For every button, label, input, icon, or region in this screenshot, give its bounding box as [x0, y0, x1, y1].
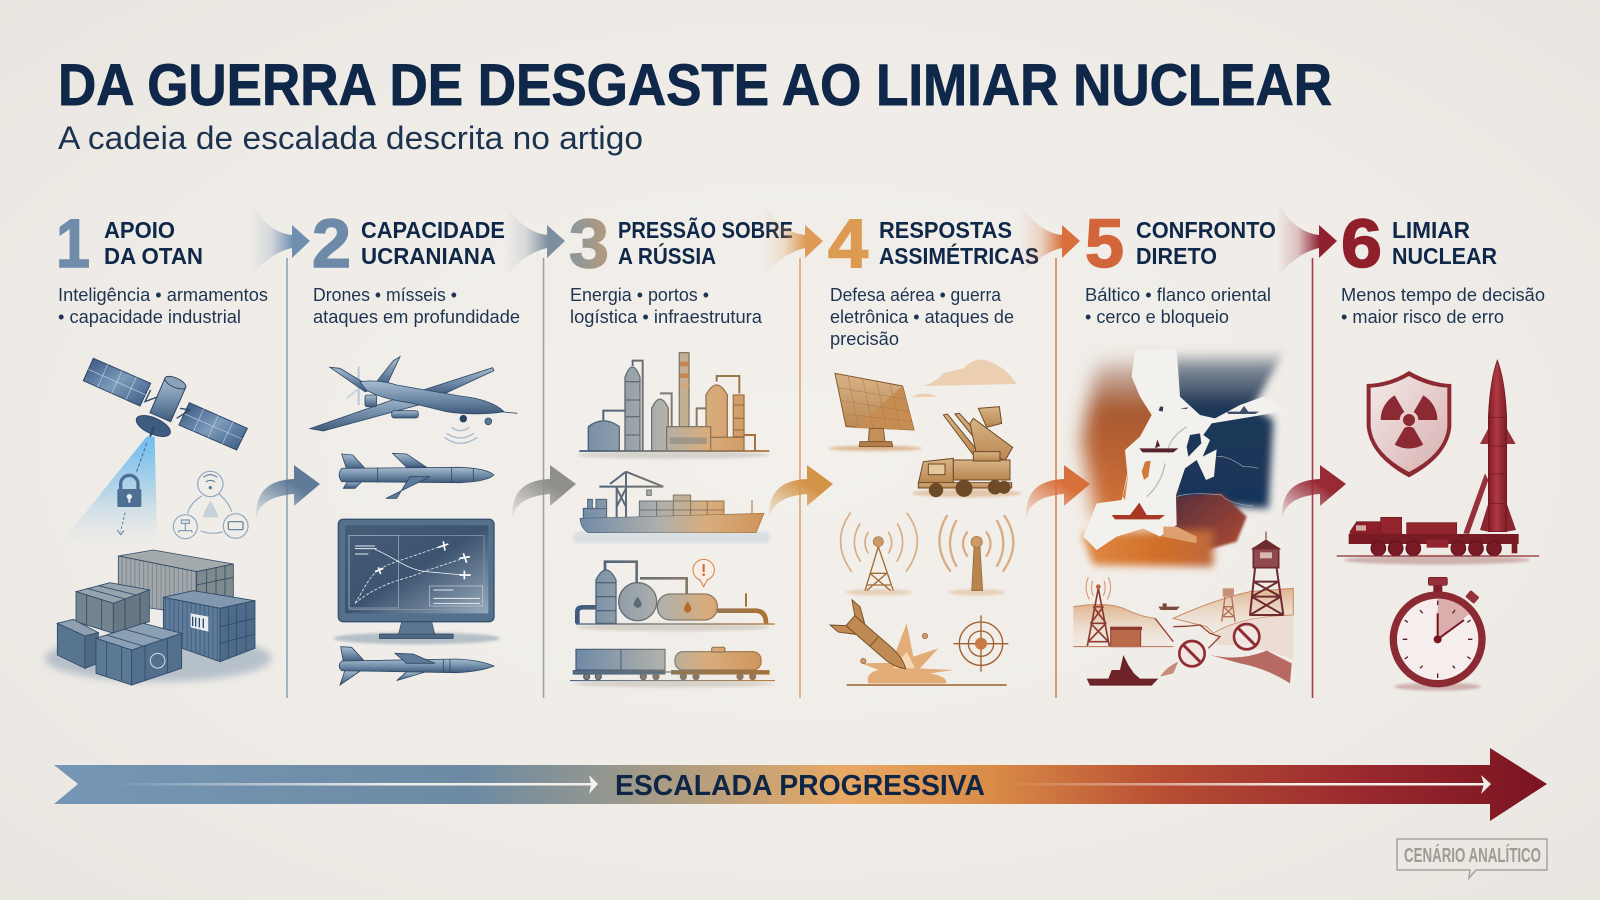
icon: freight train: [570, 647, 775, 687]
top arrows between step headers: [250, 203, 1337, 277]
icon: network cycle: [173, 471, 248, 539]
step 1 header: 1: [56, 205, 90, 282]
icon: supply containers and crates: [45, 550, 272, 685]
icon: nuclear shield: [1367, 371, 1451, 477]
icon: second missile: [339, 647, 494, 685]
step 3 header: 3: [569, 205, 609, 282]
step 2 header: ataques em profundidade: [313, 306, 520, 327]
illustrations steps 1 and 2: [45, 357, 517, 685]
step 5 header: • cerco e bloqueio: [1085, 306, 1229, 327]
icon: electronic warfare towers: [841, 513, 1013, 596]
icon: air-defence launcher truck: [912, 407, 1022, 497]
step 4 header: [828, 205, 1039, 349]
icon: cruise missile: [339, 453, 494, 498]
step 1 header: APOIO: [104, 217, 175, 243]
logo: Cenário Analítico: [1397, 839, 1547, 878]
step 2 header: CAPACIDADE: [361, 217, 505, 243]
step 6 header: NUCLEAR: [1392, 243, 1497, 269]
step 4 header: RESPOSTAS: [879, 217, 1012, 243]
step 1 header: Inteligência • armamentos: [58, 284, 268, 305]
map: Baltic region: [1082, 350, 1285, 567]
step 6 header: • maior risco de erro: [1341, 306, 1504, 327]
step 4 header: ASSIMÉTRICAS: [879, 242, 1039, 269]
step 5 header: CONFRONTO: [1136, 217, 1276, 243]
icon: satellite beam and lock: [63, 437, 157, 548]
icon: ballistic missile on launcher: [1337, 360, 1539, 565]
step 6 header: [1341, 205, 1545, 327]
step 5 header: Báltico • flanco oriental: [1085, 284, 1271, 305]
step 1 header: [56, 205, 268, 327]
step 6 header: Menos tempo de decisão: [1341, 284, 1545, 305]
icon: stopwatch: [1390, 577, 1486, 691]
icon: cargo ship and crane: [573, 472, 770, 543]
subtitle: A cadeia de escalada descrita no artigo: [58, 120, 643, 156]
step 2 header: [312, 205, 520, 327]
step 3 header: Energia • portos •: [570, 284, 709, 305]
step 2 header: 2: [312, 205, 351, 282]
step 4 header: 4: [828, 205, 868, 282]
step 3 header: logística • infraestrutura: [570, 306, 763, 327]
step 3 header: A RÚSSIA: [618, 242, 716, 269]
step 1 header: • capacidade industrial: [58, 306, 241, 327]
step 4 header: eletrônica • ataques de: [830, 306, 1014, 327]
icon: drone: [310, 357, 517, 443]
icon: pipeline and tanks: [576, 559, 775, 631]
icon: control monitor: [333, 519, 500, 644]
step 5 header: [1085, 205, 1276, 327]
icon: border scene with towers and blocks: [1073, 532, 1293, 686]
escalation arrow: [54, 748, 1547, 821]
middle curved arrows: [256, 465, 1346, 522]
step 6 header: 6: [1341, 205, 1382, 282]
title: DA GUERRA DE DESGASTE AO LIMIAR NUCLEAR: [58, 53, 1332, 118]
icon: refinery: [577, 353, 770, 459]
icon: radar and clouds: [828, 359, 1017, 451]
step 4 header: precisão: [830, 328, 899, 349]
icon: precision strike: [830, 600, 1008, 685]
step 2 header: Drones • mísseis •: [313, 284, 457, 305]
illustrations steps 5 and 6: [1073, 350, 1539, 691]
step 1 header: DA OTAN: [104, 243, 203, 269]
step 6 header: LIMIAR: [1392, 217, 1470, 243]
dividers between steps: [287, 258, 1312, 698]
step 4 header: Defesa aérea • guerra: [830, 284, 1002, 305]
illustrations steps 3 and 4: [570, 353, 1022, 687]
icon: satellite: [83, 358, 247, 450]
step 2 header: UCRANIANA: [361, 243, 496, 269]
step 5 header: DIRETO: [1136, 243, 1217, 269]
step 3 header: PRESSÃO SOBRE: [618, 216, 793, 243]
step 3 header: [569, 205, 793, 327]
escalation arrow: ESCALADA PROGRESSIVA: [615, 770, 985, 802]
step 5 header: 5: [1085, 205, 1124, 282]
